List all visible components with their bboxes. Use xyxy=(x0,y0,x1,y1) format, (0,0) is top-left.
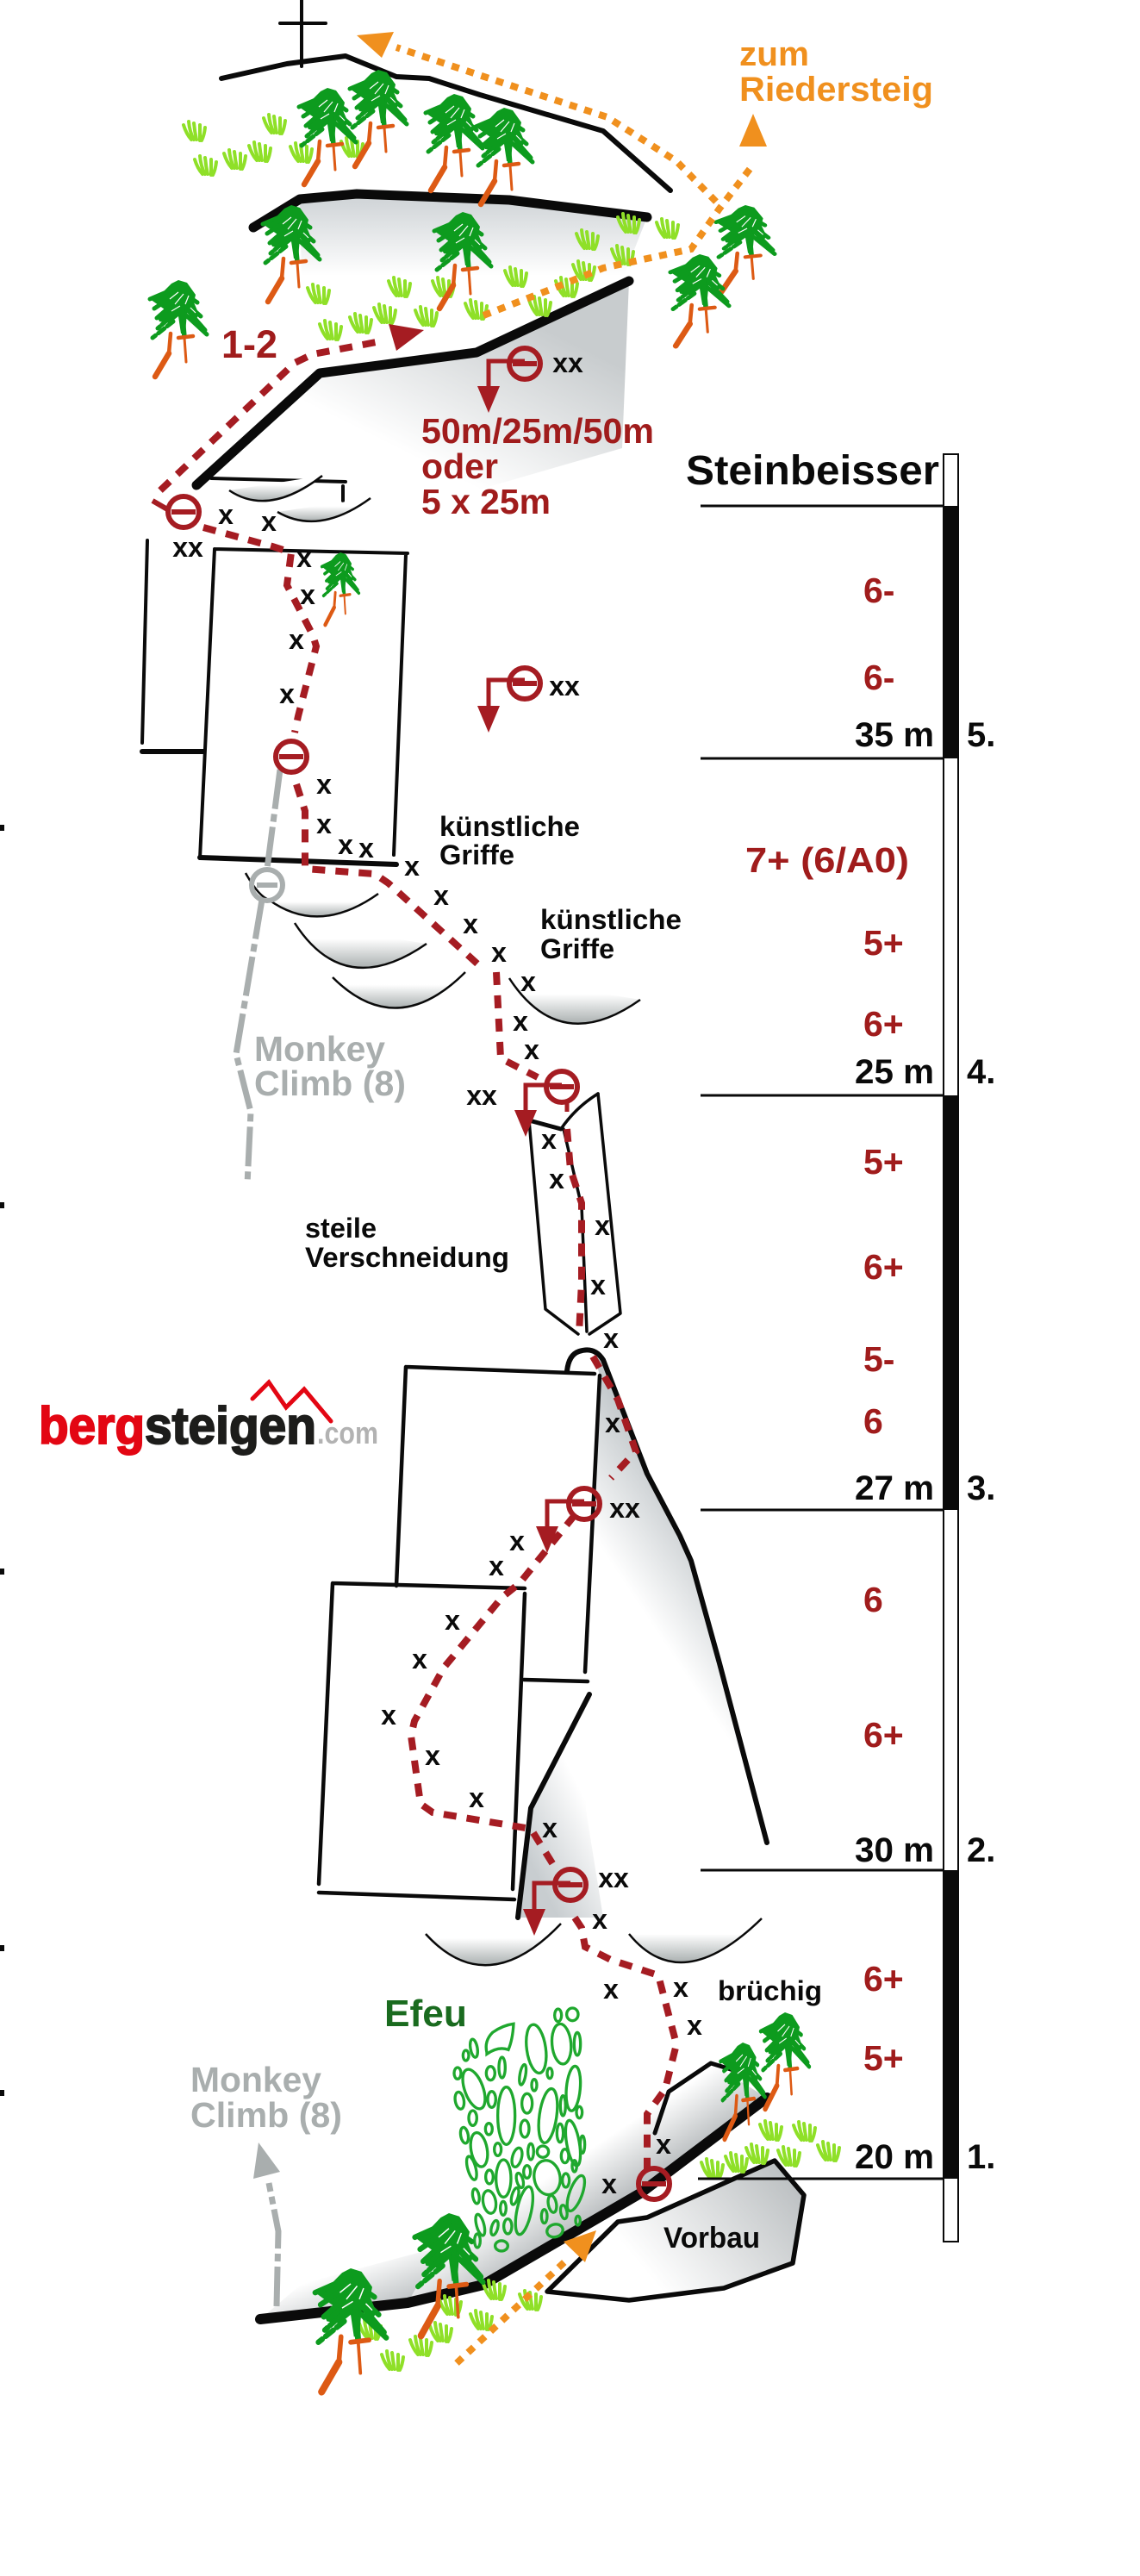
protection markers: x xyxy=(404,851,420,882)
protection markers: x xyxy=(520,966,536,997)
trees lower xyxy=(315,2012,809,2392)
protection markers: x xyxy=(425,1740,440,1771)
grades: 6 xyxy=(863,1401,883,1441)
protection markers: x xyxy=(592,1904,607,1935)
logo: bergsteigen.com: steigen xyxy=(145,1397,316,1455)
orange approach routes xyxy=(357,32,767,2363)
grades: 6+ xyxy=(863,1715,904,1755)
grades: 5- xyxy=(863,1339,894,1379)
protection markers: x xyxy=(489,1550,504,1581)
label: Monkey Climb lower: Climb (8) xyxy=(190,2095,342,2135)
protection markers: x xyxy=(445,1605,460,1636)
protection markers: x xyxy=(509,1525,525,1556)
pitch lengths and numbers: 4. xyxy=(967,1053,995,1091)
grey anchor Monkey Climb xyxy=(252,870,283,901)
protection markers: x xyxy=(524,1034,539,1065)
double-bolt markers: xx xyxy=(609,1493,640,1524)
pitch lengths and numbers: 35 m xyxy=(855,716,934,754)
label: steile Verschneidung: steile xyxy=(305,1213,377,1244)
protection markers: x xyxy=(218,499,234,530)
protection markers: x xyxy=(687,2010,702,2041)
double-bolt markers: xx xyxy=(172,532,203,563)
pitch scale bar xyxy=(698,454,959,2242)
belay station rappel 2 xyxy=(477,668,540,733)
buttress outline xyxy=(567,1350,767,1843)
grades: 5+ xyxy=(863,1142,904,1182)
protection markers: x xyxy=(296,542,312,573)
lower roofs xyxy=(426,1918,762,1965)
edge tick marks xyxy=(0,825,4,2096)
grades: 5+ xyxy=(863,2038,904,2078)
label: Efeu: Efeu xyxy=(384,1993,467,2035)
central wall blocks xyxy=(319,1367,600,1899)
belay station rappel 1 xyxy=(477,348,540,413)
label: künstliche Griffe 2: künstliche xyxy=(540,904,682,935)
label: steile Verschneidung: Verschneidung xyxy=(305,1242,509,1273)
Vorbau block xyxy=(547,2161,804,2300)
label: Monkey Climb upper xyxy=(254,1029,406,1103)
grades: 7+ (6/A0) xyxy=(745,840,909,880)
pitch lengths and numbers: 2. xyxy=(967,1831,995,1869)
protection markers: x xyxy=(603,1323,619,1354)
protection markers: x xyxy=(541,1124,557,1155)
pitch lengths and numbers: 1. xyxy=(967,2138,995,2176)
grades: 6+ xyxy=(863,1247,904,1287)
pitch lengths and numbers: 27 m xyxy=(855,1469,934,1507)
protection markers: x xyxy=(358,833,374,864)
label: rappel lengths: oder xyxy=(421,446,498,486)
protection markers xyxy=(218,499,702,2199)
belay station 3 xyxy=(514,1071,577,1137)
belay station start xyxy=(168,496,199,527)
protection markers: x xyxy=(381,1700,396,1731)
pitch lengths and numbers: 25 m xyxy=(855,1053,934,1091)
pitch lengths and numbers: 3. xyxy=(967,1469,995,1507)
middle ledge line xyxy=(196,281,629,485)
grey Monkey Climb route upper xyxy=(236,770,280,1184)
label: künstliche Griffe 2: Griffe xyxy=(540,933,614,964)
double-bolt markers: xx xyxy=(552,347,583,378)
double-bolt markers: xx xyxy=(598,1862,629,1893)
heading: Steinbeisser: Steinbeisser xyxy=(686,448,939,494)
protection markers: x xyxy=(300,579,315,610)
label: Monkey Climb lower xyxy=(190,2060,342,2135)
protection markers: x xyxy=(491,937,507,968)
pitch lengths and numbers: 20 m xyxy=(855,2138,934,2176)
protection markers: x xyxy=(656,2129,671,2160)
label: rappel lengths: 5 x 25m xyxy=(421,482,551,521)
protection markers: x xyxy=(338,829,353,860)
protection markers: x xyxy=(261,506,277,537)
double-bolt markers xyxy=(172,347,640,1893)
label: Monkey Climb upper: Monkey xyxy=(254,1029,385,1069)
chimney (steile Verschneidung) xyxy=(529,1094,620,1334)
ivy xyxy=(454,2008,589,2251)
grades: 6+ xyxy=(863,1004,904,1044)
protection markers: x xyxy=(549,1163,564,1194)
slope line xyxy=(518,1694,589,1918)
summit cross xyxy=(280,0,326,66)
logo: bergsteigen.com: berg xyxy=(39,1397,145,1455)
upper ledge line xyxy=(253,194,647,228)
label: zum Riedersteig: zum xyxy=(739,35,809,73)
grey rock shading xyxy=(207,194,767,2319)
label: künstliche Griffe 2 xyxy=(540,904,682,964)
belay station 4 xyxy=(536,1488,600,1553)
logo: bergsteigen.com xyxy=(39,1382,378,1455)
upper wall blocks xyxy=(142,540,408,864)
label: zum Riedersteig: Riedersteig xyxy=(739,71,933,109)
protection markers: x xyxy=(605,1407,620,1438)
protection markers: x xyxy=(412,1644,427,1675)
label: steile Verschneidung xyxy=(305,1213,509,1273)
grades: 6 xyxy=(863,1580,883,1619)
protection markers: x xyxy=(673,1972,688,2003)
logo: bergsteigen.com: .com xyxy=(317,1415,378,1450)
small rock outline xyxy=(655,2063,742,2133)
label: künstliche Griffe 1: künstliche xyxy=(439,811,580,842)
bottom ledge line xyxy=(260,2098,767,2319)
protection markers: x xyxy=(590,1269,606,1300)
grades: 6- xyxy=(863,571,894,610)
protection markers: x xyxy=(433,880,449,911)
belay station start of route xyxy=(639,2168,670,2199)
label: künstliche Griffe 1: Griffe xyxy=(439,839,514,870)
grades: 6- xyxy=(863,658,894,697)
overhang arcs xyxy=(246,873,640,1024)
grades xyxy=(745,571,909,2078)
grass tufts upper xyxy=(184,115,678,340)
label: künstliche Griffe 1 xyxy=(439,811,580,870)
small roofs below ledge xyxy=(211,476,371,521)
belay station 5 xyxy=(523,1869,586,1936)
protection markers: x xyxy=(595,1210,610,1241)
pitch lengths and numbers: 30 m xyxy=(855,1831,934,1869)
double-bolt markers: xx xyxy=(466,1080,497,1111)
label: rappel lengths xyxy=(421,411,654,521)
protection markers: x xyxy=(316,769,332,800)
grades: 6+ xyxy=(863,1959,904,1999)
label: 1-2: 1-2 xyxy=(221,322,277,366)
grass tufts lower xyxy=(359,2121,839,2370)
label: brüchig: brüchig xyxy=(718,1975,822,2006)
protection markers: x xyxy=(316,808,332,839)
pitch lengths and numbers xyxy=(855,716,995,2176)
label: rappel lengths: 50m/25m/50m xyxy=(421,411,654,451)
grades: 5+ xyxy=(863,923,904,963)
protection markers: x xyxy=(289,624,304,655)
pitch lengths and numbers: 5. xyxy=(967,716,995,754)
Vorbau block: Vorbau xyxy=(663,2222,760,2255)
label: Monkey Climb lower: Monkey xyxy=(190,2060,321,2099)
grey Monkey Climb route lower xyxy=(253,2143,280,2306)
protection markers: x xyxy=(513,1006,528,1037)
label: zum Riedersteig xyxy=(739,35,933,109)
protection markers: x xyxy=(601,2168,617,2199)
rappel tick at station xyxy=(153,501,169,510)
summit ridge line xyxy=(221,56,670,190)
protection markers: x xyxy=(542,1812,558,1843)
double-bolt markers: xx xyxy=(549,671,580,702)
label: Monkey Climb upper: Climb (8) xyxy=(254,1063,406,1103)
protection markers: x xyxy=(463,908,478,939)
protection markers: x xyxy=(603,1974,619,2005)
trees upper xyxy=(150,70,775,625)
protection markers: x xyxy=(279,678,295,709)
climbing route xyxy=(160,324,676,2171)
protection markers: x xyxy=(469,1782,484,1813)
belay station 2 xyxy=(276,741,307,772)
